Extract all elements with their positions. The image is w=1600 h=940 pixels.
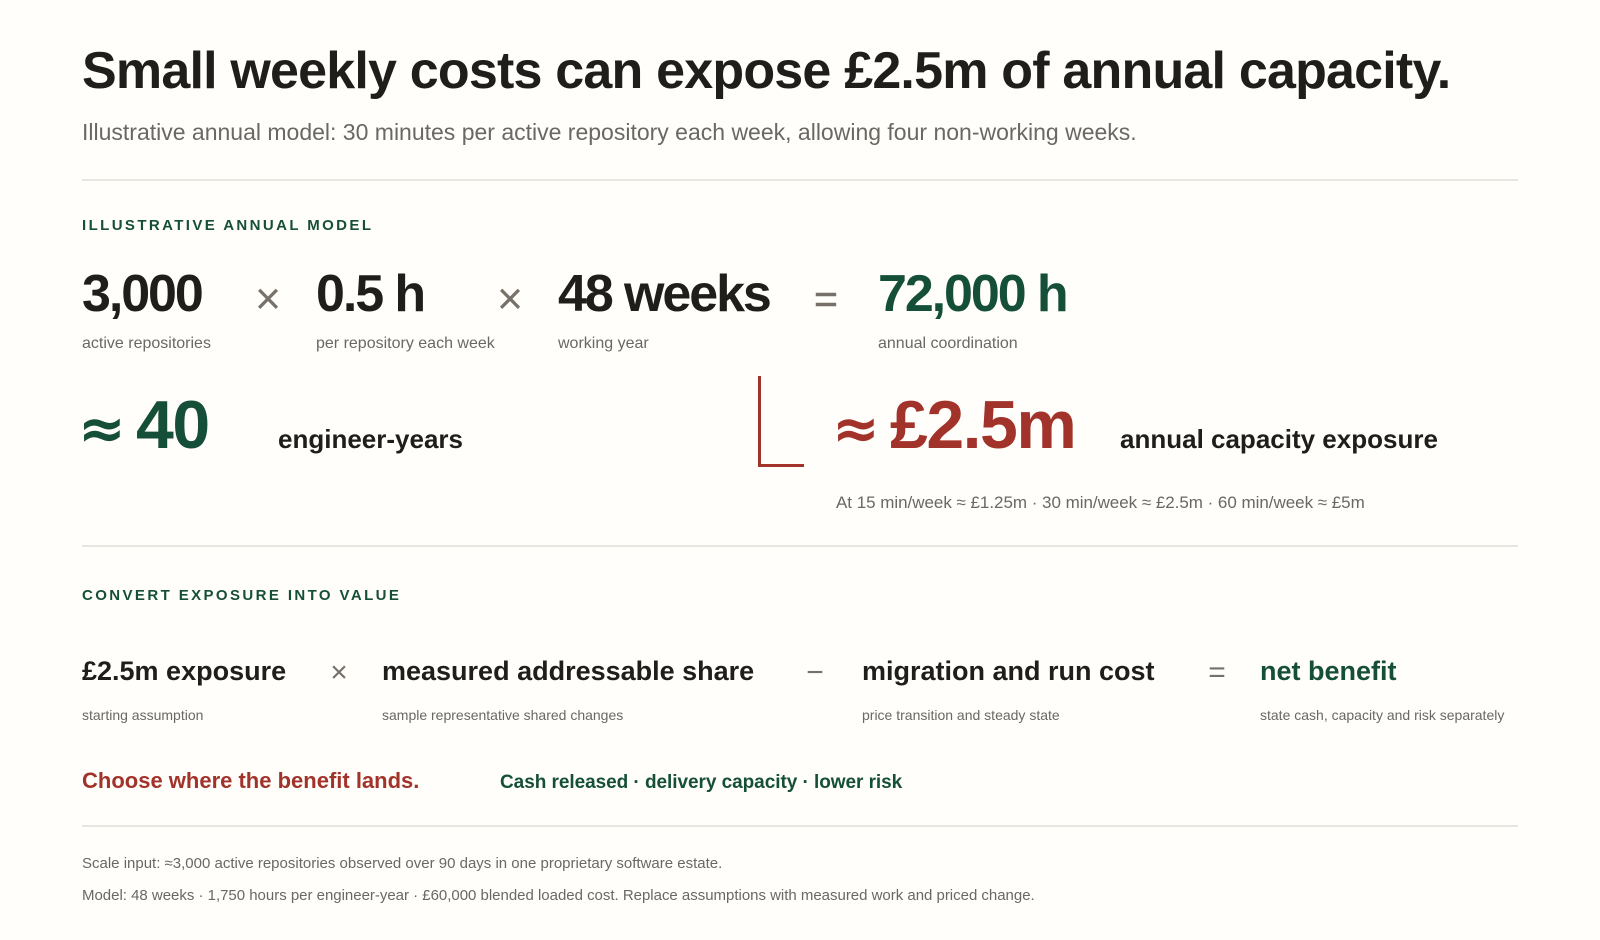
stat: annual capacity exposure: ≈ [832,396,880,462]
result: annual coordination: 72,000 h [878,265,1067,323]
term: hours per repository: 0.5 h [316,265,424,323]
result: annual coordination [878,265,1067,352]
section heading: convert exposure into value: CONVERT EXPOSURE INTO VALUE [82,587,401,604]
term: migration and run cost: price transition and steady state [862,707,1060,723]
operator: multiply: × [255,273,281,324]
stat: engineer-years: 40 [136,387,209,463]
term: addressable share: sample representative shared changes [382,707,623,723]
stat: annual capacity exposure: £2.5m [890,387,1075,463]
term: working year [558,265,770,352]
term: addressable share: measured addressable share [382,656,754,686]
result: net benefit: state cash, capacity and risk separately [1260,707,1504,723]
stat: annual capacity exposure [832,387,1438,463]
operator: minus: − [806,656,824,689]
result: net benefit [1260,656,1504,723]
term: exposure: £2.5m exposure [82,656,286,686]
result: net benefit: net benefit [1260,656,1397,686]
title: Small weekly costs can expose £2.5m of annual capacity. [82,42,1450,100]
term: working year: working year [558,335,649,352]
term: exposure: starting assumption [82,707,203,723]
term: working year: 48 weeks [558,265,770,323]
stat: annual capacity exposure: annual capacity exposure [1120,424,1438,454]
stat: engineer-years [78,387,463,463]
operator: equals: = [814,276,838,322]
operator: equals: = [1208,656,1226,689]
operator: multiply: × [497,273,523,324]
term: hours per repository [316,265,495,352]
footnote: scale input: Scale input: ≈3,000 active repositories observed over 90 days in one proprietary software estate. [82,855,722,872]
term: active repositories: active repositories [82,335,211,352]
connector: elbow arrow [758,376,804,467]
section heading: illustrative annual model: ILLUSTRATIVE ANNUAL MODEL [82,217,373,234]
sensitivity note: At 15 min/week ≈ £1.25m · 30 min/week ≈ £2.5m · 60 min/week ≈ £5m [836,493,1365,512]
callout: choose where benefit lands: Choose where the benefit lands. [82,768,419,793]
term: migration and run cost [862,656,1155,723]
stat: engineer-years: engineer-years [278,424,463,454]
operator: multiply: × [330,656,348,689]
term: active repositories [82,265,211,352]
benefit types: Cash released · delivery capacity · lower risk [500,772,902,793]
term: active repositories: 3,000 [82,265,202,323]
term: exposure [82,656,286,723]
result: annual coordination: annual coordination [878,335,1018,352]
term: migration and run cost: migration and run cost [862,656,1155,686]
term: addressable share [382,656,754,723]
stat: engineer-years: ≈ [78,396,126,462]
term: hours per repository: per repository each week [316,335,495,352]
footnote: model: Model: 48 weeks · 1,750 hours per engineer-year · £60,000 blended loaded cost. Replace assumptions with measured work and priced change. [82,887,1035,904]
subtitle: Illustrative annual model: 30 minutes per active repository each week, allowing four non-working weeks. [82,119,1137,145]
